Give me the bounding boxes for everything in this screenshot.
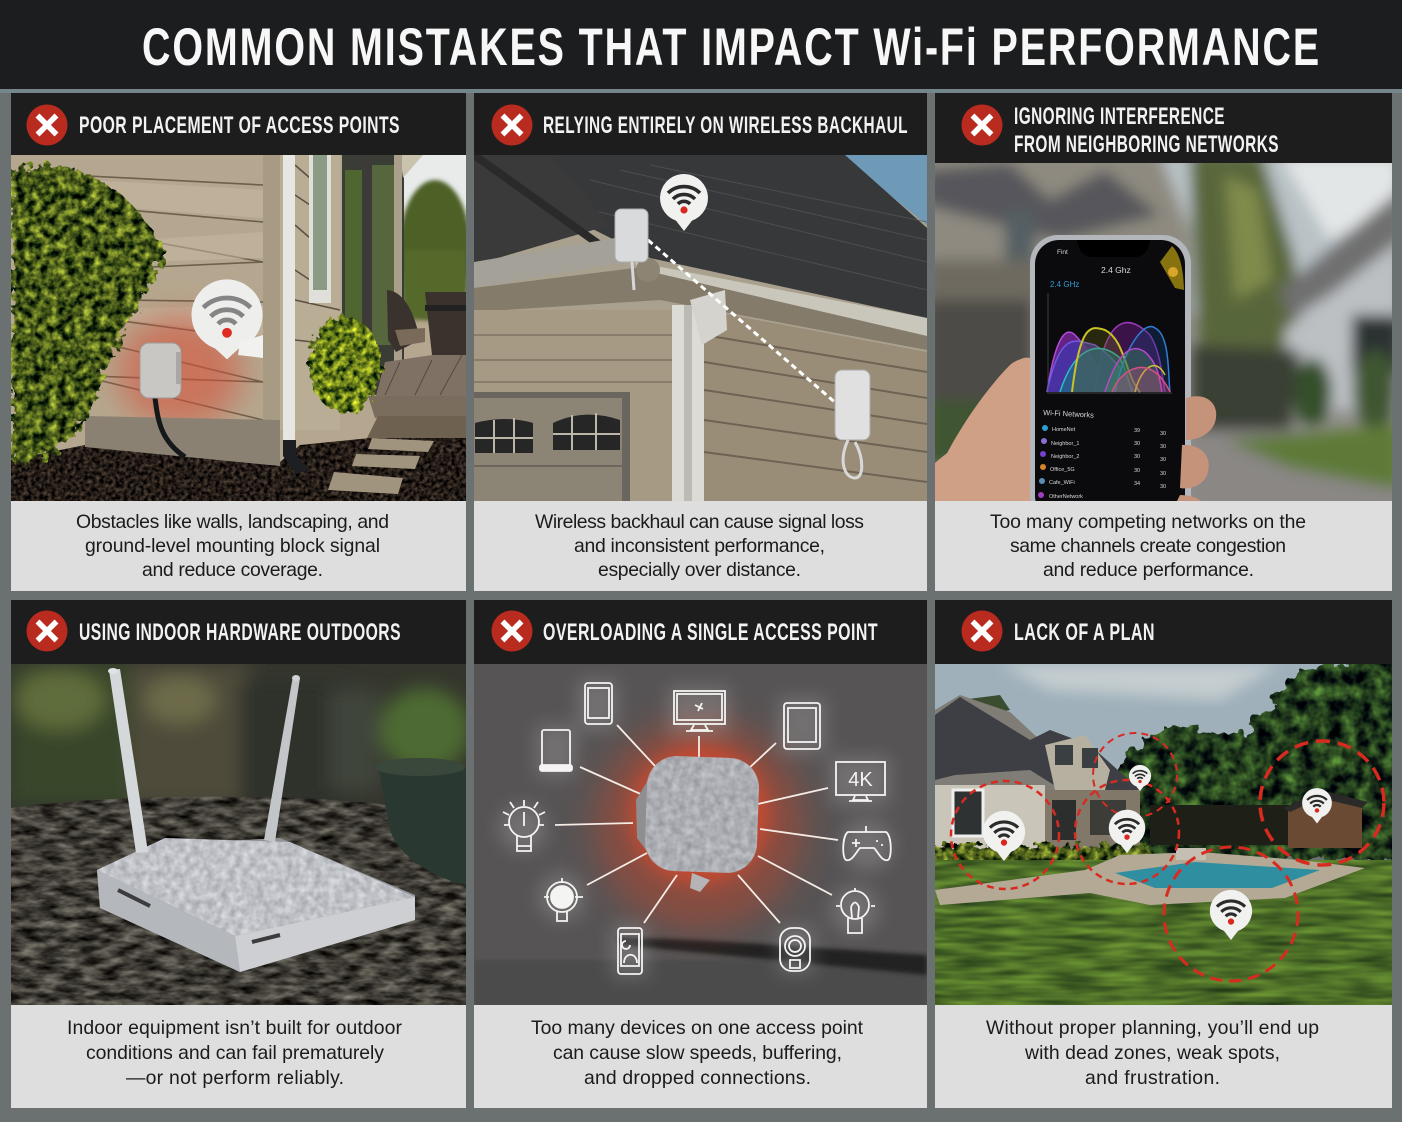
icon: round smart device — [780, 928, 810, 971]
photo: phone showing Wi-Fi analyzer: Cafe_WiFi — [1049, 480, 1075, 486]
device halos — [499, 680, 893, 978]
caption: indoor hardware — [11, 1005, 466, 1108]
photo: phone showing Wi-Fi analyzer: Office_5G — [1050, 467, 1075, 473]
caption: poor placement: and reduce coverage. — [142, 559, 323, 581]
photo: phone showing Wi-Fi analyzer: 2.4 Ghz — [1101, 265, 1131, 275]
photo: phone showing Wi-Fi analyzer: 39 — [1134, 428, 1140, 434]
panel: ignoring interference — [925, 93, 1400, 591]
icon: bulb left — [503, 800, 545, 851]
caption: interference — [935, 501, 1392, 591]
icon: tablet top left — [585, 683, 612, 724]
panel: relying on wireless backhaul — [474, 93, 927, 591]
photo: phone showing Wi-Fi analyzer: Neighbor_2 — [1051, 454, 1079, 460]
icon: tablet left — [540, 730, 572, 771]
caption: interference: Too many competing networks on the — [990, 511, 1306, 533]
caption: overloading — [474, 1005, 927, 1108]
caption: wireless backhaul: especially over distance. — [598, 559, 801, 581]
panel: lack of a plan — [935, 600, 1402, 1108]
access point — [636, 755, 760, 892]
caption: wireless backhaul — [474, 501, 927, 591]
panel: poor placement of access points — [11, 93, 471, 591]
photo: phone showing Wi-Fi analyzer: 30 — [1160, 471, 1166, 477]
photo: phone showing Wi-Fi analyzer: Wi-Fi Networks — [1043, 408, 1094, 420]
panel header: interference — [935, 93, 1392, 163]
icon: 4K screen: 4K — [848, 769, 873, 791]
caption: overloading: Too many devices on one access point — [531, 1017, 864, 1039]
panel header: indoor hardware: USING INDOOR HARDWARE OUTDOORS — [79, 619, 401, 646]
panel header: wireless backhaul: RELYING ENTIRELY ON WIRELESS BACKHAUL — [543, 112, 908, 139]
panel header: overloading: OVERLOADING A SINGLE ACCESS POINT — [543, 619, 878, 646]
dead-zone circles — [951, 733, 1384, 981]
wifi markers — [983, 765, 1332, 940]
caption: indoor hardware: —or not perform reliably. — [126, 1067, 344, 1089]
photo: phone showing Wi-Fi analyzer: 34 — [1134, 481, 1140, 487]
caption: wireless backhaul: Wireless backhaul can cause signal loss — [535, 511, 864, 533]
photo: phone showing Wi-Fi analyzer: HomeNet — [1052, 427, 1076, 433]
photo: yard with dead zones — [935, 650, 1402, 1005]
panel header: interference: IGNORING INTERFERENCE — [1014, 103, 1225, 130]
icon: bulb right — [836, 888, 875, 933]
photo: phone showing Wi-Fi analyzer: 30 — [1160, 444, 1166, 450]
photo: phone showing Wi-Fi analyzer — [935, 163, 1392, 501]
caption: wireless backhaul: and inconsistent performance, — [574, 535, 825, 557]
diagram: devices connected to one access point — [474, 664, 927, 1005]
panel header: indoor hardware — [11, 600, 466, 664]
icon: monitor — [674, 691, 725, 731]
caption: interference: same channels create congestion — [1010, 535, 1286, 557]
panel header: poor placement — [11, 93, 466, 155]
photo: phone showing Wi-Fi analyzer: 30 — [1134, 468, 1140, 474]
photo: phone showing Wi-Fi analyzer: 30 — [1160, 484, 1166, 490]
icon: 4K screen — [836, 762, 885, 801]
photo: roofline with two access points — [474, 155, 927, 501]
photo: phone showing Wi-Fi analyzer: 30 — [1134, 441, 1140, 447]
caption: lack of a plan — [935, 1005, 1392, 1108]
caption: interference: and reduce performance. — [1043, 559, 1254, 581]
photo: phone showing Wi-Fi analyzer: OtherNetwork — [1049, 494, 1083, 500]
connection lines — [555, 725, 838, 923]
icon: phone — [618, 928, 642, 974]
photo: phone showing Wi-Fi analyzer: Fint — [1057, 249, 1068, 256]
photo: phone showing Wi-Fi analyzer: 30 — [1160, 457, 1166, 463]
panel header: lack of a plan — [935, 600, 1392, 664]
title banner — [0, 0, 1402, 89]
panel header: overloading — [474, 600, 927, 664]
device icons — [503, 683, 891, 974]
photo: phone showing Wi-Fi analyzer: 30 — [1134, 454, 1140, 460]
panel: indoor hardware outdoors — [11, 600, 470, 1108]
panel: overloading a single access point — [474, 600, 927, 1108]
caption: indoor hardware: conditions and can fail prematurely — [86, 1042, 384, 1064]
caption: overloading: can cause slow speeds, buffering, — [553, 1042, 842, 1064]
caption: indoor hardware: Indoor equipment isn’t built for outdoor — [67, 1017, 403, 1039]
photo: indoor router in rain — [11, 664, 470, 1005]
photo: phone showing Wi-Fi analyzer: Neighbor_1 — [1051, 441, 1079, 447]
photo: house wall with access point — [11, 155, 471, 501]
icon: gamepad — [843, 826, 891, 860]
panel header: lack of a plan: LACK OF A PLAN — [1014, 619, 1155, 646]
caption: lack of a plan: and frustration. — [1085, 1067, 1220, 1089]
house — [935, 695, 1140, 860]
caption: lack of a plan: Without proper planning, you’ll end up — [986, 1017, 1319, 1039]
caption: poor placement — [11, 501, 466, 591]
panel header: poor placement: POOR PLACEMENT OF ACCESS POINTS — [79, 112, 400, 139]
panel header: wireless backhaul — [474, 93, 927, 155]
icon: filled bulb — [544, 878, 583, 921]
icon: tablet right — [784, 703, 820, 749]
caption: overloading: and dropped connections. — [584, 1067, 811, 1089]
photo: phone showing Wi-Fi analyzer: 2.4 GHz — [1050, 280, 1079, 289]
photo: phone showing Wi-Fi analyzer: 30 — [1160, 431, 1166, 437]
caption: lack of a plan: with dead zones, weak spots, — [1024, 1042, 1280, 1064]
caption: poor placement: Obstacles like walls, landscaping, and — [76, 511, 389, 533]
caption: poor placement: ground-level mounting block signal — [85, 535, 380, 557]
